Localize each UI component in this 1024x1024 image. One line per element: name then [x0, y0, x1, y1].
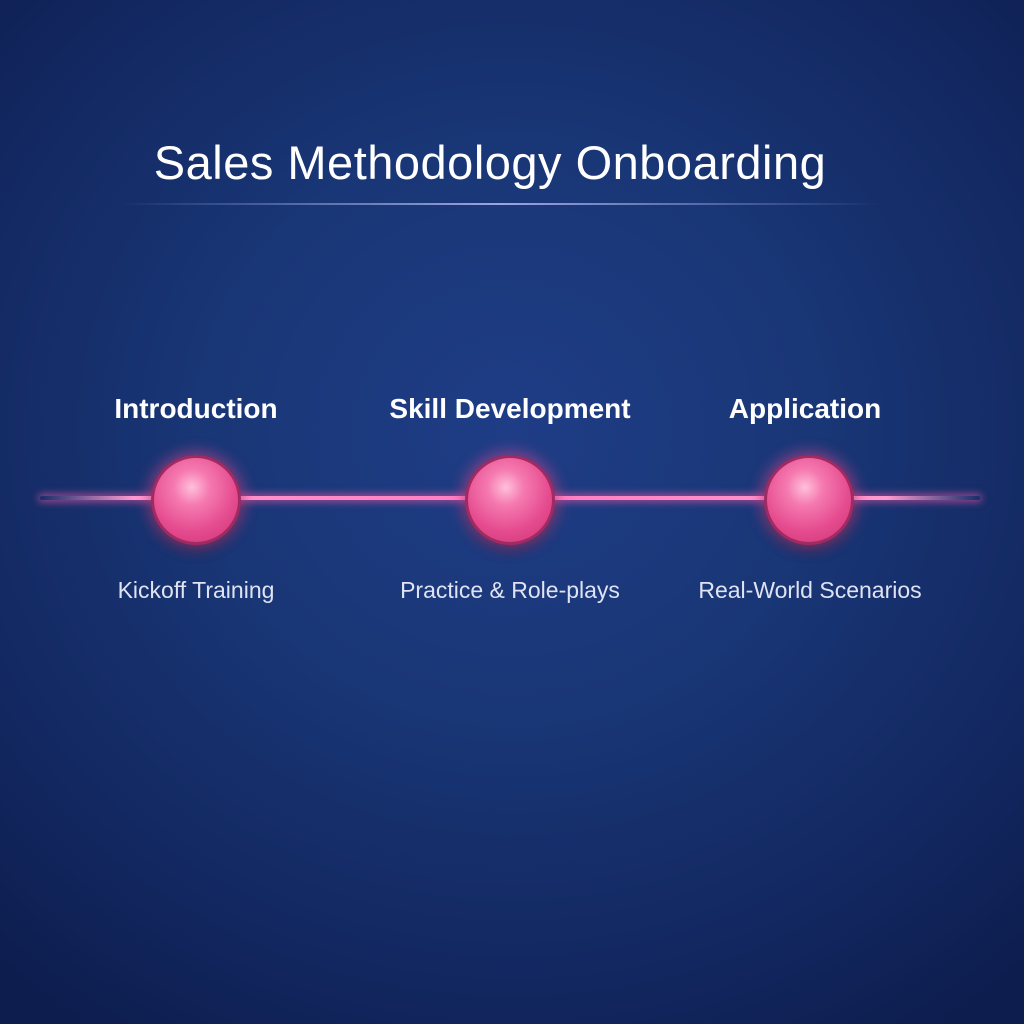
heading: Application: Application: [729, 393, 881, 424]
heading: Skill Development: Skill Development: [389, 393, 631, 424]
step 2: Skill Development: [389, 393, 631, 603]
title underline: [120, 203, 880, 205]
title: Sales Methodology Onboarding: [154, 136, 826, 189]
label: Practice & Role-plays: Practice & Role-plays: [400, 577, 620, 603]
step 3: Application: [698, 393, 922, 603]
label: Real-World Scenarios: Real-World Scenarios: [698, 577, 922, 603]
timeline line: [40, 496, 980, 500]
heading: Introduction: Introduction: [114, 393, 278, 424]
node 1: [151, 455, 241, 545]
step 1: Introduction: [114, 393, 278, 603]
node 3: [764, 455, 854, 545]
node 2: [465, 455, 555, 545]
label: Kickoff Training: Kickoff Training: [118, 577, 274, 603]
